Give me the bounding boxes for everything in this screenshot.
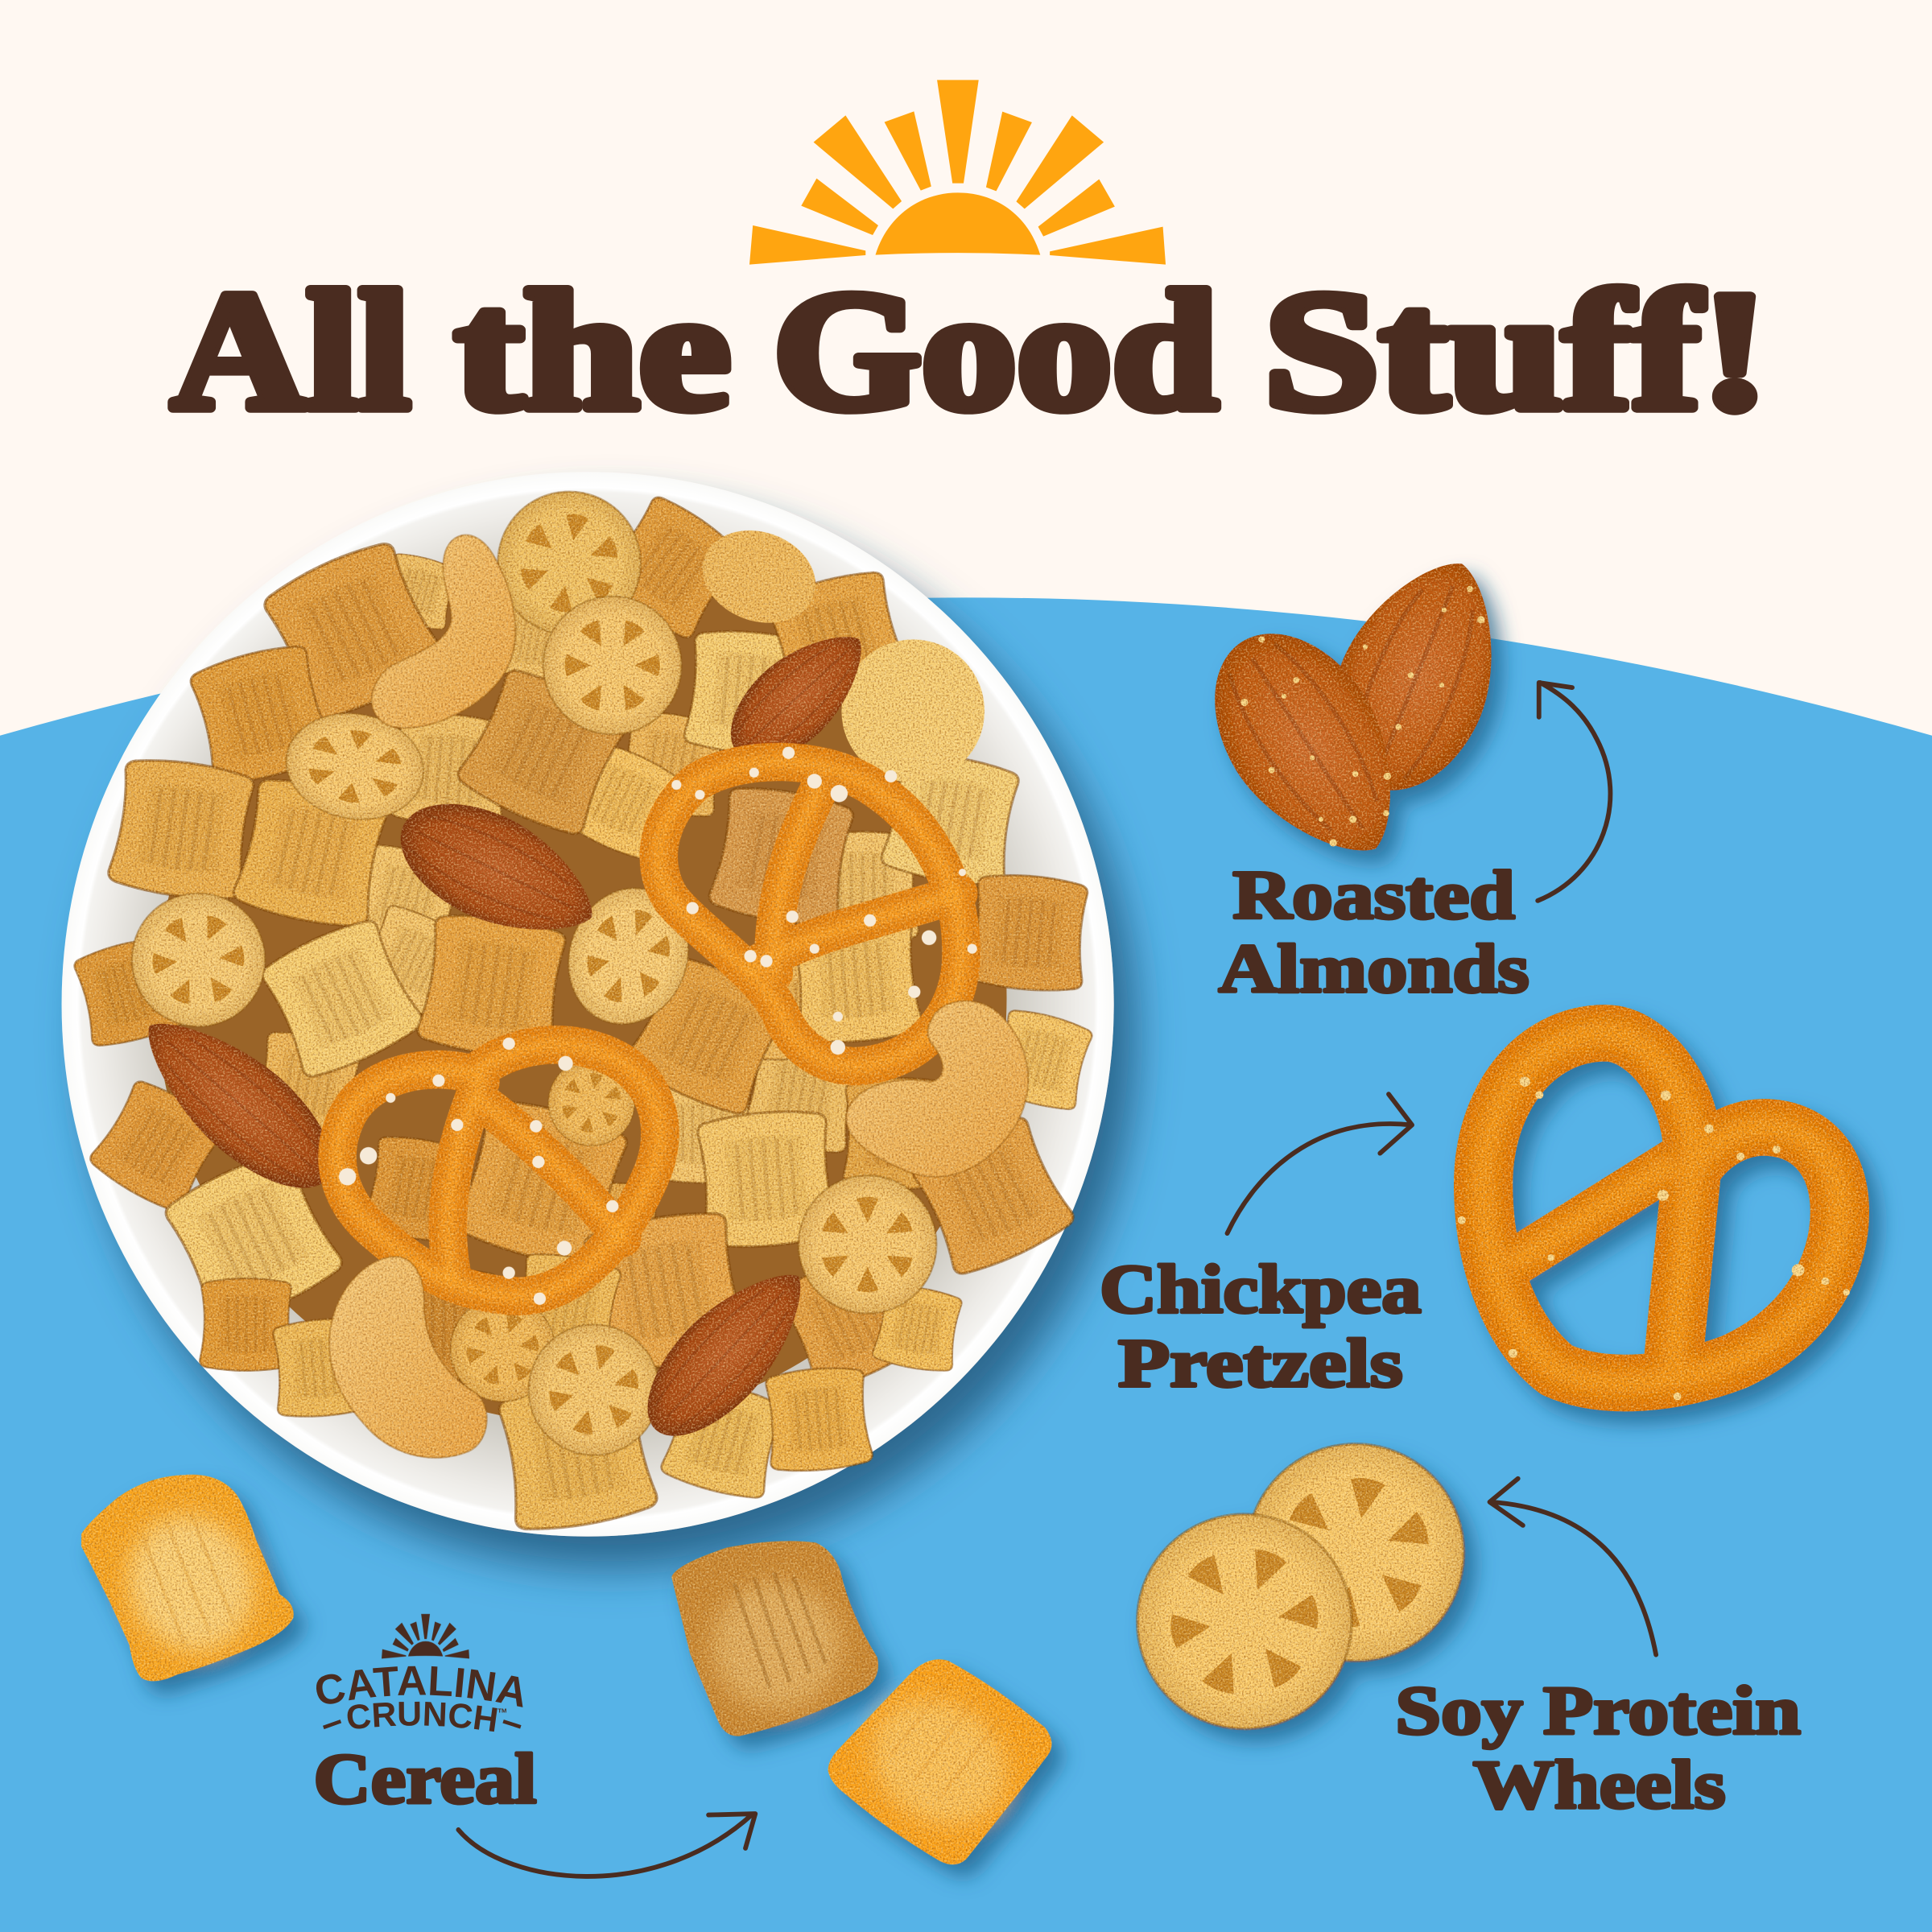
icon: roasted almonds — [1179, 536, 1531, 890]
title: Stuff! — [1264, 257, 1769, 445]
label: chickpea pretzels — [1100, 1251, 1422, 1402]
logo wordmark: CATALINA — [316, 1666, 523, 1707]
arrow: roasted almonds — [1538, 683, 1610, 901]
label: chickpea pretzels: Chickpea — [1100, 1251, 1422, 1327]
logo: Catalina Crunch — [316, 1613, 523, 1732]
bowl of snack mix — [62, 472, 1114, 1537]
arrow: chickpea pretzels — [1227, 1094, 1412, 1233]
label: soy protein wheels: Wheels — [1473, 1746, 1726, 1823]
label: roasted almonds — [1219, 857, 1529, 1007]
arrow: cereal — [458, 1814, 755, 1876]
icon: soy protein wheels — [1105, 1427, 1481, 1761]
title — [171, 257, 1769, 445]
arrow: soy protein wheels — [1490, 1479, 1656, 1655]
label: cereal: Cereal — [314, 1740, 537, 1818]
logo: Catalina Crunch: CRUNCH — [348, 1702, 497, 1732]
bowl — [62, 472, 1114, 1537]
cereal piece: orange — [828, 1659, 1051, 1864]
label: chickpea pretzels: Pretzels — [1118, 1325, 1403, 1402]
label: roasted almonds: Roasted — [1232, 857, 1515, 933]
label: soy protein wheels — [1395, 1673, 1801, 1823]
title: Good — [773, 257, 1218, 445]
logo: Catalina Crunch: TM — [497, 1707, 506, 1715]
bowl contents — [70, 481, 1096, 1536]
icon: loose cereal pieces — [81, 1475, 1051, 1864]
logo sun — [382, 1614, 469, 1658]
cereal piece: golden left — [81, 1475, 294, 1681]
cereal and wheels — [70, 481, 1096, 1536]
cereal piece: brown — [671, 1541, 878, 1736]
icon: chickpea pretzel — [1458, 1033, 1850, 1400]
pretzels in bowl — [337, 762, 961, 1296]
almonds in bowl — [119, 609, 887, 1460]
label: soy protein wheels: Soy Protein — [1395, 1673, 1801, 1749]
title: the — [455, 257, 731, 445]
salt grains — [339, 747, 977, 1305]
sun icon — [749, 80, 1166, 265]
title: All — [171, 257, 411, 445]
label: roasted almonds: Almonds — [1219, 931, 1529, 1007]
cashews in bowl — [329, 535, 1028, 1458]
background: blue curved panel — [0, 597, 1932, 1932]
